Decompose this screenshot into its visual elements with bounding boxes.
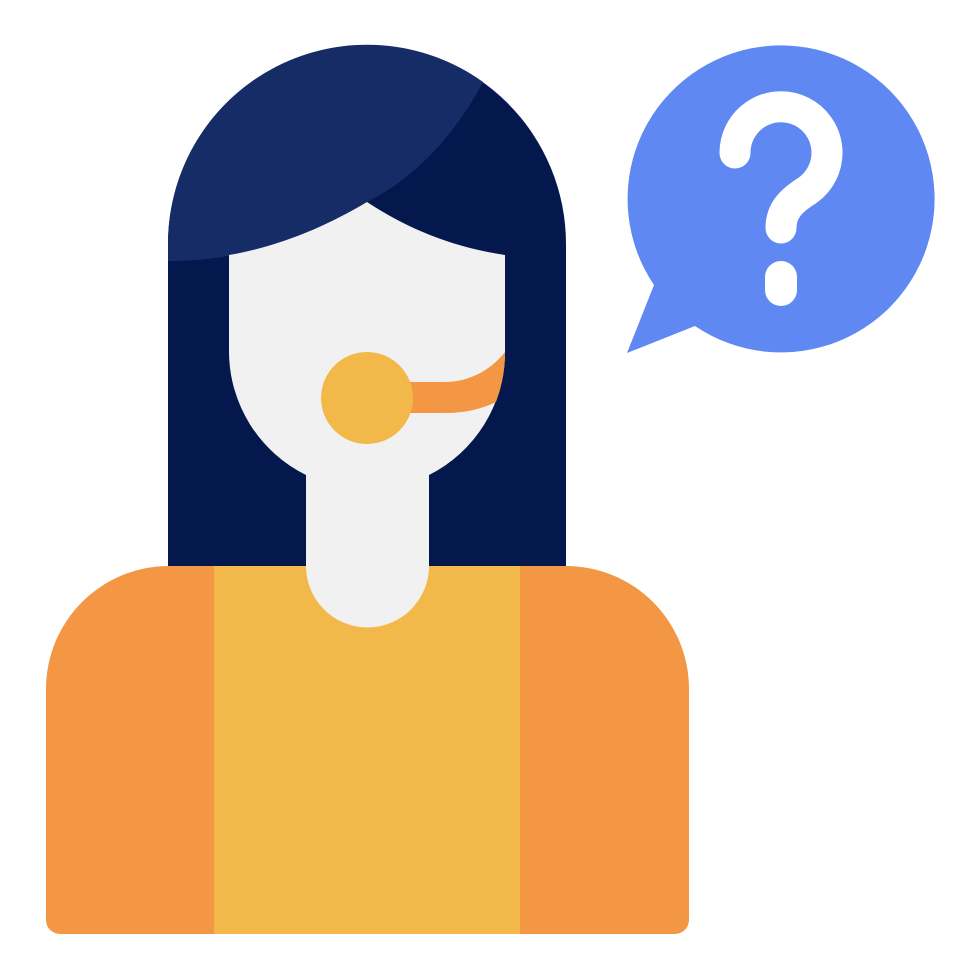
headset arm xyxy=(400,352,505,413)
question mark hook xyxy=(735,107,827,228)
hair highlight xyxy=(168,45,483,261)
face and neck xyxy=(229,202,505,627)
question mark dot xyxy=(765,261,797,306)
headset microphone xyxy=(321,352,413,444)
torso: shirt front xyxy=(214,566,520,934)
speech bubble xyxy=(627,45,935,353)
hair back xyxy=(168,45,566,570)
torso: sleeves xyxy=(46,566,689,934)
